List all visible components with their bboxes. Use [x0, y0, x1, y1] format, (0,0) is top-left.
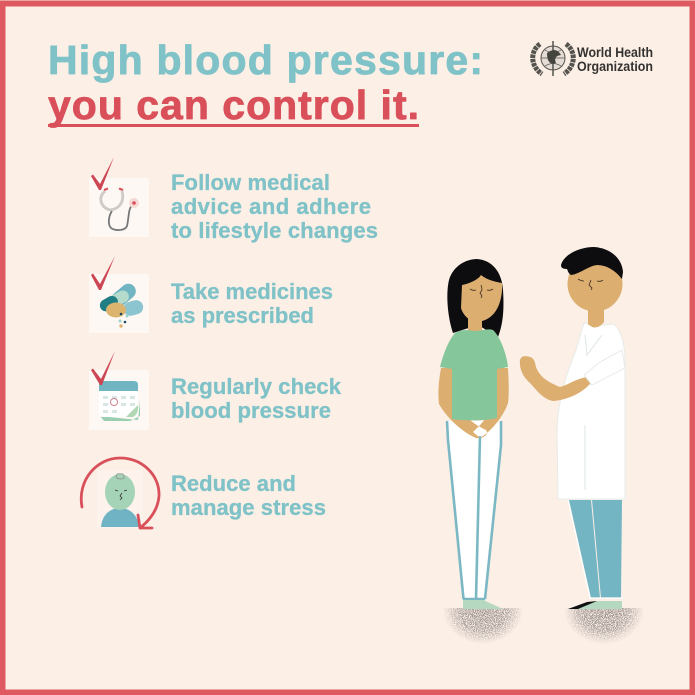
icon: pills	[89, 274, 149, 333]
text: reduce and manage stress	[171, 471, 326, 520]
text: reduce and manage stress: Reduce and	[171, 471, 296, 496]
text: take medicines: as prescribed	[171, 303, 314, 328]
wordmark: Organization	[577, 58, 653, 74]
wordmark: World Health	[577, 44, 653, 60]
head	[568, 256, 622, 312]
text: take medicines	[171, 279, 333, 328]
text: follow medical advice: advice and adhere	[171, 194, 371, 219]
coat seam	[585, 335, 623, 490]
arrow: circular red arrow	[81, 458, 159, 528]
ground shadow under man	[564, 608, 644, 644]
logo: World Health Organization	[533, 41, 653, 76]
black shoe	[568, 601, 597, 609]
text: follow medical advice: Follow medical	[171, 170, 330, 195]
trouser edge highlight	[568, 500, 623, 598]
text: regularly check	[171, 374, 342, 423]
icon: stressed person	[97, 470, 143, 528]
illustration: woman patient	[438, 259, 509, 609]
hair	[561, 247, 623, 279]
coat	[557, 323, 625, 499]
text: regularly check: Regularly check	[171, 374, 342, 399]
shoes	[463, 600, 503, 609]
wordmark	[577, 44, 653, 74]
icon: stethoscope	[89, 178, 149, 237]
item 4: reduce stress	[81, 458, 326, 528]
hair	[447, 259, 503, 337]
arm and hand	[520, 356, 592, 401]
icon: check mark	[91, 256, 115, 290]
sleeve	[584, 350, 625, 385]
trousers	[447, 421, 501, 598]
icon: check mark	[91, 351, 115, 385]
icon: check mark	[91, 157, 114, 190]
item 3: check blood pressure	[89, 351, 342, 430]
title: High blood pressure:	[48, 37, 483, 83]
trousers	[569, 500, 622, 598]
arms	[438, 368, 509, 438]
text: follow medical advice	[171, 170, 378, 243]
icon: WHO emblem	[533, 41, 573, 76]
text: follow medical advice: to lifestyle changes	[171, 218, 378, 243]
text: take medicines: Take medicines	[171, 279, 333, 304]
trouser outlines	[447, 421, 501, 599]
neck	[588, 300, 604, 328]
title	[48, 37, 483, 128]
item 2: take medicines	[89, 256, 333, 333]
shoes	[577, 601, 622, 609]
icon: calendar	[89, 370, 149, 430]
item 1: follow medical advice	[89, 157, 378, 243]
ground shadow under woman	[443, 608, 523, 644]
facial features	[470, 285, 493, 298]
title: you can control it.	[48, 82, 419, 128]
shirt	[440, 329, 508, 420]
illustration: male doctor	[520, 247, 625, 609]
neck	[468, 312, 482, 332]
text: reduce and manage stress: manage stress	[171, 495, 326, 520]
face	[461, 275, 502, 322]
facial features	[578, 279, 603, 290]
text: regularly check: blood pressure	[171, 398, 331, 423]
